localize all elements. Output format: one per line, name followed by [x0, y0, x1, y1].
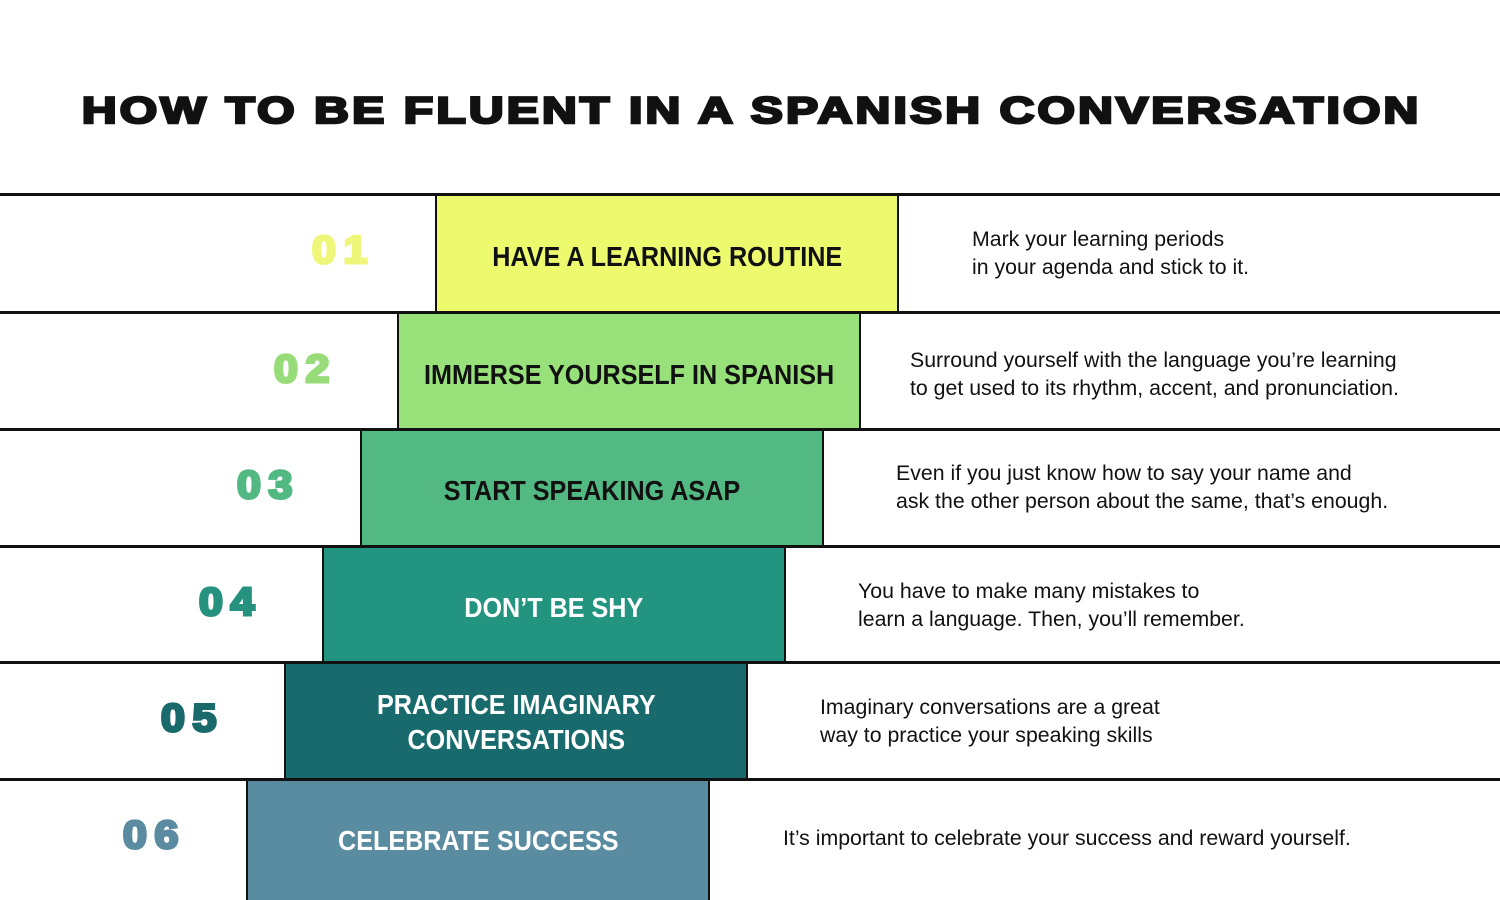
- row 3: start speaking: [237, 431, 1388, 545]
- box 4: DON’T BE SHY: [465, 592, 643, 623]
- box 3: START SPEAKING ASAP: [444, 474, 740, 506]
- description 1: Mark your learning periods: [972, 227, 1224, 251]
- number 04: 04: [199, 581, 262, 624]
- description 3: ask the other person about the same, that’s enough.: [896, 489, 1388, 513]
- description 1: [972, 227, 1249, 279]
- box 6: CELEBRATE SUCCESS: [338, 825, 618, 856]
- description 4: [858, 579, 1245, 631]
- description 3: Even if you just know how to say your name and: [896, 461, 1352, 485]
- box 5: [284, 664, 748, 778]
- box 5: PRACTICE IMAGINARY: [377, 689, 655, 720]
- description 5: way to practice your speaking skills: [820, 723, 1153, 747]
- box 2: IMMERSE YOURSELF IN SPANISH: [424, 358, 834, 390]
- box 5: CONVERSATIONS: [407, 724, 625, 755]
- box 1: [435, 196, 899, 311]
- title: HOW TO BE FLUENT IN A SPANISH CONVERSATION: [82, 90, 1418, 132]
- description 2: to get used to its rhythm, accent, and pronunciation.: [910, 376, 1399, 400]
- row 5: imaginary conversations: [161, 664, 1160, 778]
- row 2: immerse yourself: [274, 314, 1399, 428]
- description 5: [820, 695, 1160, 747]
- number 03: 03: [237, 464, 300, 507]
- description 2: [910, 348, 1399, 400]
- description 2: Surround yourself with the language you’re learning: [910, 348, 1397, 372]
- box 6: [246, 781, 710, 900]
- description 5: Imaginary conversations are a great: [820, 695, 1160, 719]
- description 4: learn a language. Then, you’ll remember.: [858, 607, 1245, 631]
- description 3: [896, 461, 1388, 513]
- row 1: have a learning routine: [312, 196, 1249, 311]
- number 02: 02: [274, 348, 337, 391]
- number 06: 06: [123, 814, 186, 857]
- box 3: [360, 431, 824, 545]
- description 4: You have to make many mistakes to: [858, 579, 1199, 603]
- box 1: HAVE A LEARNING ROUTINE: [492, 241, 842, 272]
- number 01: 01: [312, 229, 375, 272]
- number 05: 05: [161, 697, 224, 740]
- box 2: [397, 314, 861, 428]
- description 6: It’s important to celebrate your success and reward yourself.: [783, 826, 1351, 850]
- description 1: in your agenda and stick to it.: [972, 255, 1249, 279]
- row 4: don't be shy: [199, 548, 1245, 661]
- box 4: [322, 548, 786, 661]
- row 6: celebrate success: [123, 781, 1351, 900]
